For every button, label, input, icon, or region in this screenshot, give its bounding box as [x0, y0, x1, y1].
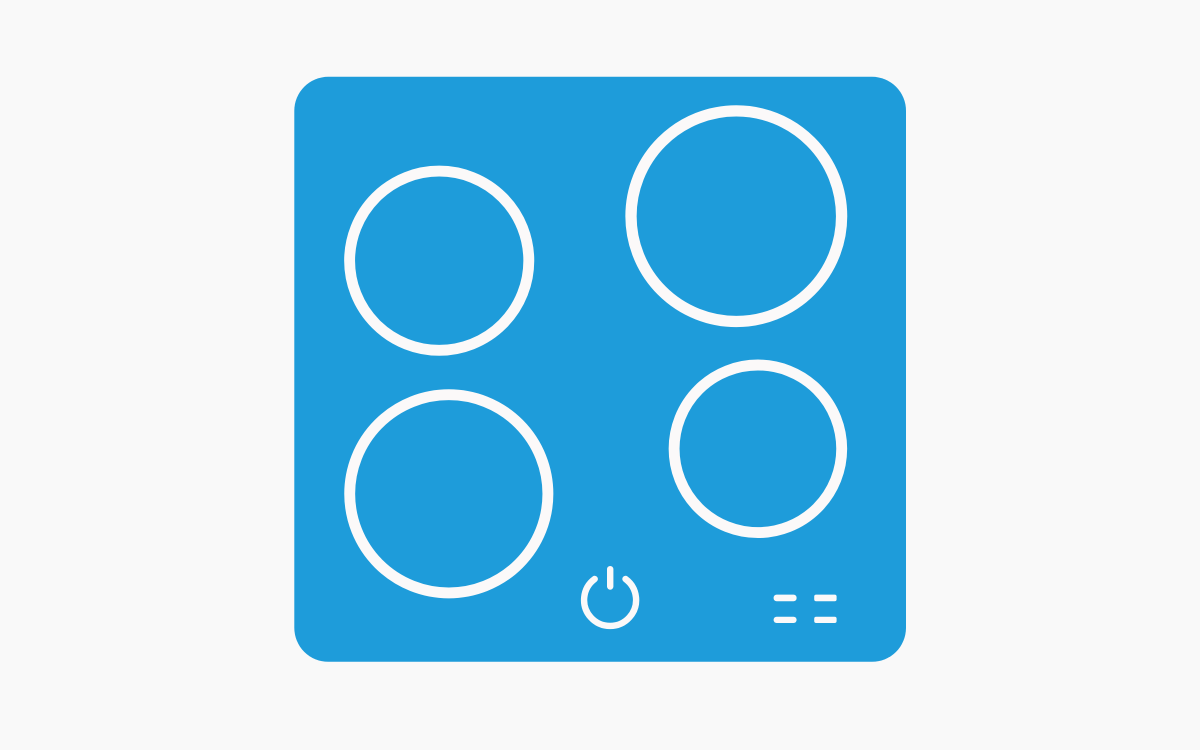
icon: control dashes [774, 595, 837, 623]
panel: cooktop surface [294, 77, 906, 662]
icon: power button [584, 569, 636, 626]
burner: top left [350, 171, 529, 350]
burner: top right [631, 111, 842, 322]
burner: bottom right [674, 365, 842, 533]
burner: bottom left [350, 395, 548, 593]
